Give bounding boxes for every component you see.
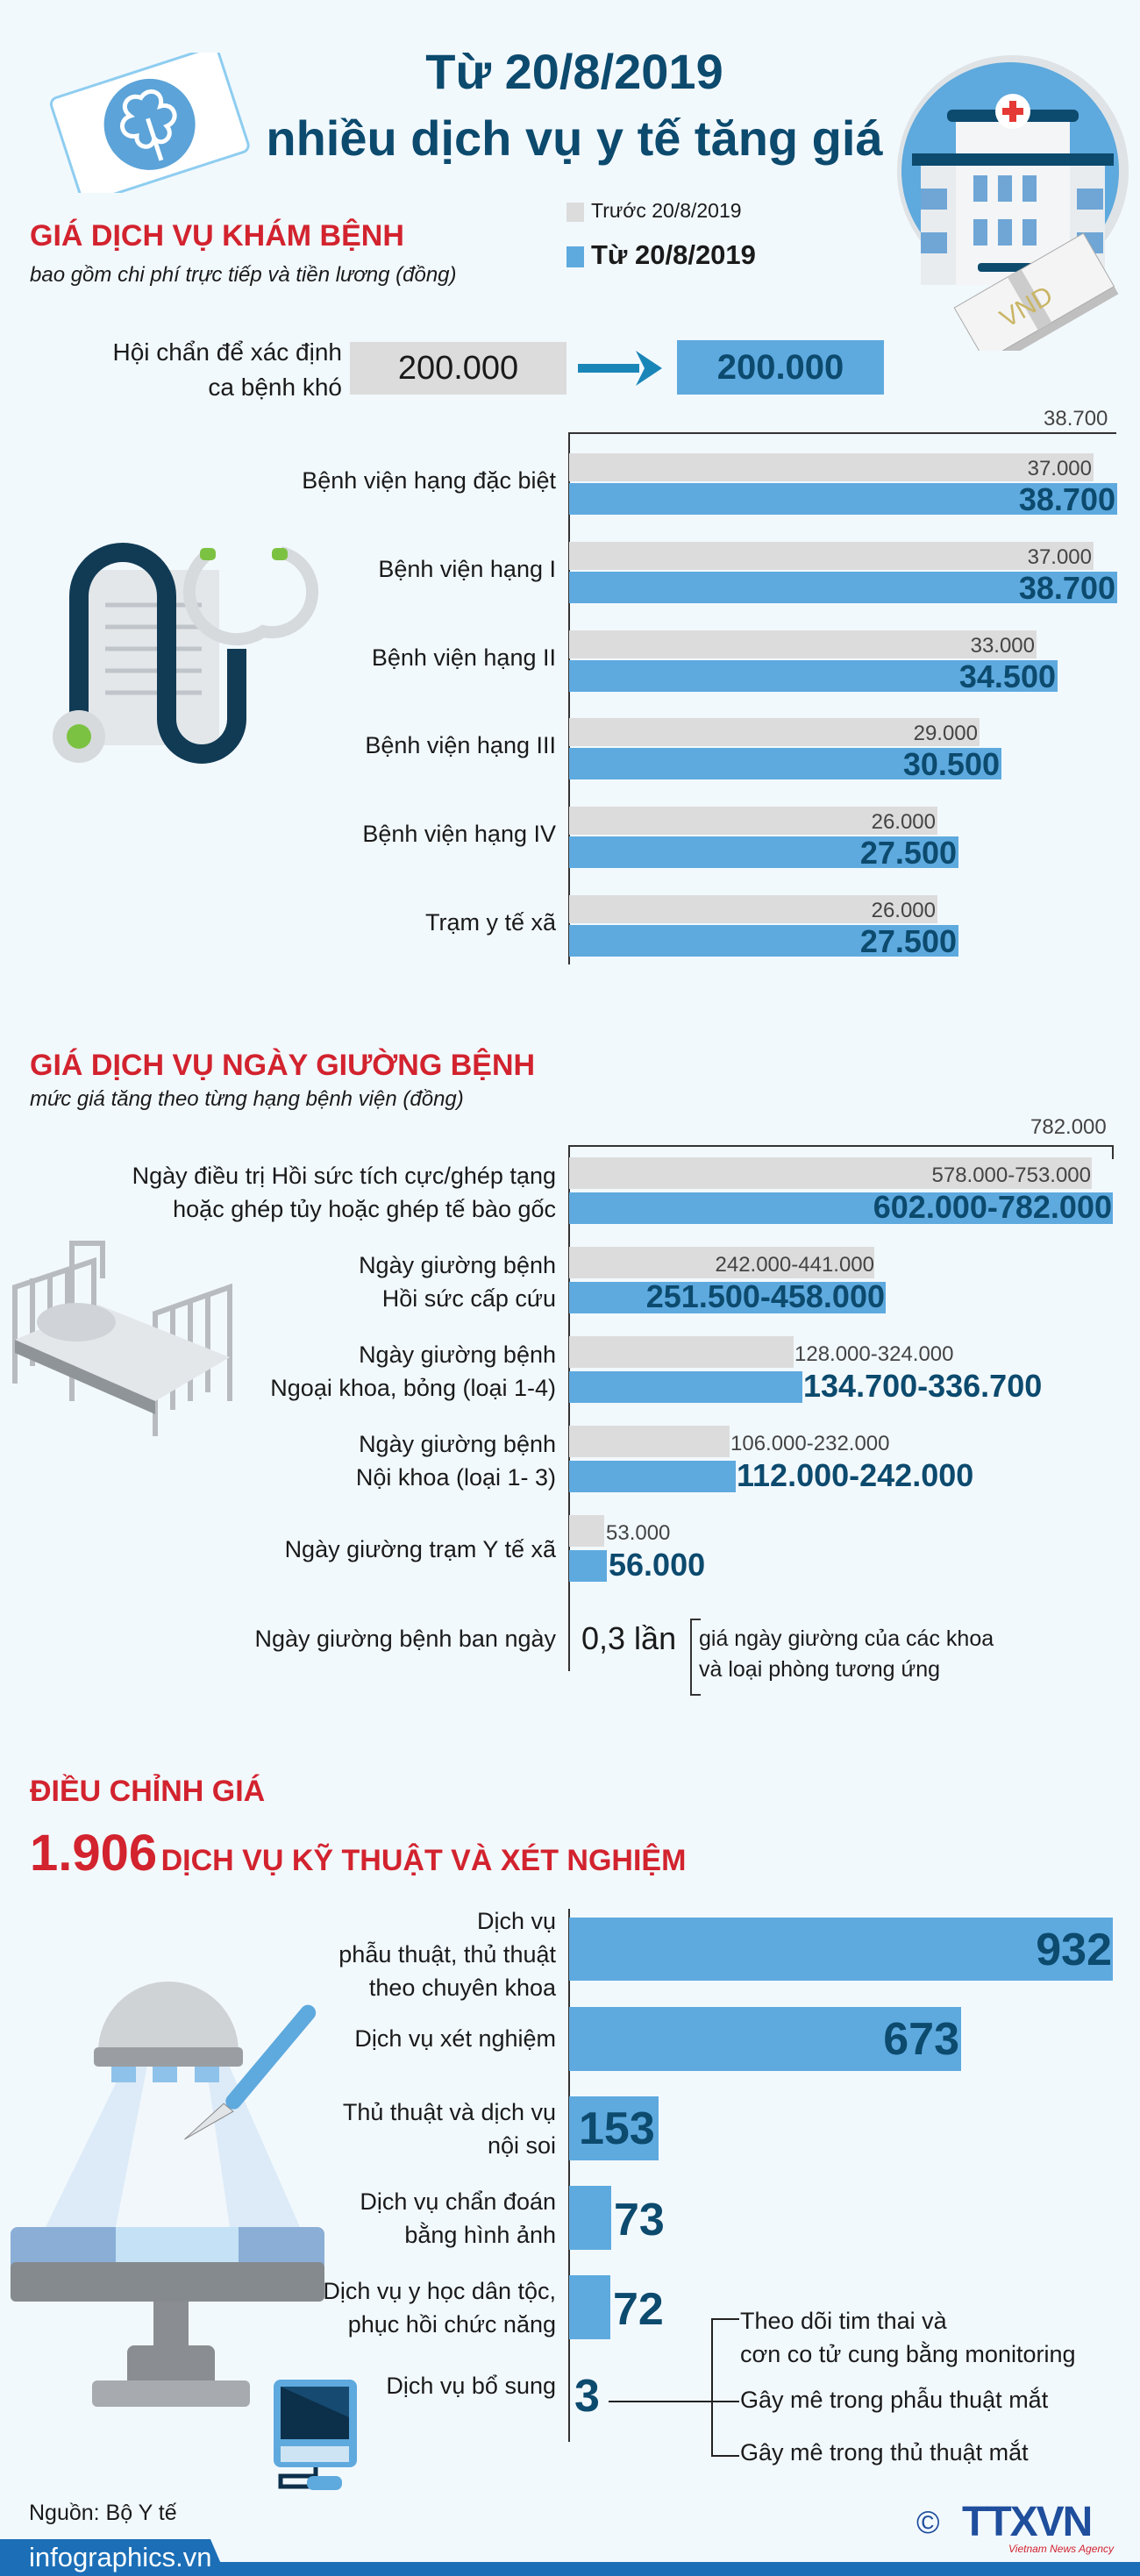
bar: xét nghiệm 673: 673 [883, 2014, 959, 2065]
bar: hình ảnh 73: 73 [614, 2195, 665, 2245]
row: hạng III: 29.000 [914, 722, 978, 745]
icon: hospital with money: VND [995, 281, 1058, 333]
row: trạm y tế xã: 56.000 [609, 1547, 705, 1583]
row: ban ngày: 0,3 lần [581, 1620, 676, 1656]
icon: table pedestal [92, 2302, 250, 2407]
row: ngoại khoa: Ngày giường bệnh [359, 1341, 556, 1368]
row: hội chẩn [112, 338, 884, 401]
source: Nguồn: Bộ Y tế [29, 2501, 177, 2525]
row: nội khoa [356, 1426, 973, 1493]
subtitle: khám bệnh: bao gồm chi phí trực tiếp và tiền lương (đồng) [30, 263, 457, 287]
bar: bổ sung 3 [386, 2371, 600, 2422]
bar chart: dịch vụ kỹ thuật [323, 1908, 1113, 2466]
row: nội khoa: 112.000-242.000 [737, 1457, 973, 1493]
row: trạm y tế xã [425, 895, 958, 959]
logo: TTXVN: TTXVN [962, 2499, 1091, 2545]
logo: TTXVN: Vietnam News Agency [1008, 2543, 1114, 2555]
row: hội chẩn: 200.000 [717, 348, 844, 387]
legend: Từ 20/8/2019 [591, 239, 756, 270]
row: hồi sức tích cực [132, 1157, 1113, 1225]
callout: dịch vụ bổ sung: Theo dõi tim thai và [740, 2308, 947, 2334]
icon: ultrasound monitor [274, 2380, 357, 2490]
row: hạng IV [362, 807, 958, 871]
callout: dịch vụ bổ sung [609, 2308, 1075, 2466]
legend: Trước 20/8/2019 [591, 199, 742, 222]
row: ban ngày: Ngày giường bệnh ban ngày [254, 1626, 556, 1652]
bar: bổ sung 3: 3 [574, 2371, 600, 2422]
callout: dịch vụ bổ sung: Gây mê trong thủ thuật mắt [740, 2439, 1029, 2466]
row: hạng I: 38.700 [1019, 570, 1115, 606]
row: hạng II [372, 630, 1058, 694]
callout: dịch vụ bổ sung: Gây mê trong phẫu thuật mắt [740, 2387, 1048, 2413]
row: hồi sức tích cực: 602.000-782.000 [873, 1189, 1112, 1225]
row: hồi sức cấp cứu: Hồi sức cấp cứu [382, 1285, 556, 1312]
icon: health insurance card [49, 53, 250, 193]
bar: hình ảnh 73 [360, 2186, 665, 2250]
row: ban ngày [254, 1619, 994, 1696]
row: ngoại khoa: Ngoại khoa, bỏng (loại 1-4) [270, 1375, 556, 1401]
row: hồi sức cấp cứu [359, 1247, 886, 1314]
bar: hình ảnh 73: Dịch vụ chẩn đoán [360, 2188, 556, 2215]
row: trạm y tế xã: 53.000 [606, 1521, 670, 1545]
icon: hospital with money [897, 55, 1129, 351]
bar: bổ sung 3: Dịch vụ bổ sung [386, 2373, 556, 2399]
row: trạm y tế xã: Ngày giường trạm Y tế xã [285, 1536, 556, 1562]
row: hạng II: 34.500 [959, 658, 1056, 694]
bar: nội soi 153: 153 [579, 2103, 655, 2154]
icon: surgery lamp and table [11, 1982, 324, 2302]
logo: TTXVN: © [916, 2504, 940, 2540]
row: hạng II: Bệnh viện hạng II [372, 644, 556, 671]
row: hạng IV: Bệnh viện hạng IV [362, 821, 556, 847]
row: hạng III: Bệnh viện hạng III [365, 732, 556, 758]
row: nội khoa: 106.000-232.000 [730, 1432, 889, 1455]
bar: y học dân tộc 72: 72 [613, 2284, 664, 2335]
bar: y học dân tộc 72 [323, 2275, 664, 2339]
title: Từ 20/8/2019 [425, 44, 723, 99]
footer band: infographics.vn [29, 2542, 212, 2572]
bar: phẫu thuật 932 [338, 1908, 1113, 2001]
row: hạng III [365, 718, 1001, 782]
row: ngoại khoa [270, 1336, 1042, 1404]
row: nội khoa: Ngày giường bệnh [359, 1431, 556, 1457]
bar: hình ảnh 73: bằng hình ảnh [404, 2222, 556, 2248]
row: hạng I [378, 542, 1117, 606]
bar: y học dân tộc 72: phục hồi chức năng [348, 2311, 556, 2338]
heading: 1.906 dịch vụ: 1.906 DỊCH VỤ KỸ THUẬT VÀ XÉT NGHIỆM [30, 1825, 686, 1882]
row: ngoại khoa: 128.000-324.000 [794, 1342, 954, 1366]
row: hồi sức tích cực: hoặc ghép tủy hoặc ghép tế bào gốc [173, 1196, 556, 1222]
row: hạng I: 37.000 [1028, 545, 1092, 569]
heading: ngày giường: GIÁ DỊCH VỤ NGÀY GIƯỜNG BỆNH [30, 1049, 535, 1082]
bar: nội soi 153 [343, 2096, 659, 2160]
icon: hospital bed [12, 1241, 232, 1436]
bar chart: khám bệnh: 38.700 [1044, 407, 1108, 431]
row: ban ngày: giá ngày giường của các khoa [699, 1626, 994, 1651]
row: hạng đặc biệt: 38.700 [1019, 481, 1115, 517]
row: hạng đặc biệt [302, 453, 1117, 517]
callout: dịch vụ bổ sung: cơn co tử cung bằng monitoring [740, 2341, 1075, 2367]
row: hội chẩn: Hội chẩn để xác định [112, 338, 342, 366]
bar chart: ngày giường: 782.000 [1030, 1115, 1107, 1139]
row: ban ngày: và loại phòng tương ứng [699, 1657, 940, 1682]
row: trạm y tế xã: 27.500 [860, 923, 957, 959]
bar: xét nghiệm 673 [354, 2007, 961, 2071]
row: hồi sức tích cực: 578.000-753.000 [931, 1163, 1091, 1187]
bar: phẫu thuật 932: 932 [1036, 1925, 1112, 1975]
bar: y học dân tộc 72: Dịch vụ y học dân tộc, [323, 2278, 556, 2304]
row: hạng đặc biệt: Bệnh viện hạng đặc biệt [302, 467, 556, 494]
row: hạng IV: 26.000 [872, 810, 936, 834]
bar: phẫu thuật 932: Dịch vụ [477, 1908, 556, 1934]
row: trạm y tế xã [285, 1515, 705, 1583]
row: nội khoa: Nội khoa (loại 1- 3) [356, 1464, 556, 1491]
row: hội chẩn: ca bệnh khó [208, 374, 342, 401]
row: hạng đặc biệt: 37.000 [1028, 457, 1092, 480]
row: hạng II: 33.000 [971, 634, 1035, 658]
bar: phẫu thuật 932: phẫu thuật, thủ thuật [338, 1941, 556, 1968]
footer band [0, 2539, 1140, 2576]
row: hồi sức tích cực: Ngày điều trị Hồi sức tích cực/ghép tạng [132, 1163, 556, 1189]
row: hội chẩn: 200.000 [398, 350, 518, 387]
bar: nội soi 153: Thủ thuật và dịch vụ [343, 2099, 556, 2125]
row: hồi sức cấp cứu: Ngày giường bệnh [359, 1252, 556, 1278]
row: hồi sức cấp cứu: 251.500-458.000 [646, 1278, 885, 1314]
subtitle: ngày giường: mức giá tăng theo từng hạng bệnh viện (đồng) [30, 1087, 464, 1111]
title [266, 44, 883, 166]
bar: nội soi 153: nội soi [488, 2132, 556, 2159]
row: hạng III: 30.500 [903, 746, 1000, 782]
heading: điều chỉnh giá: ĐIỀU CHỈNH GIÁ [30, 1775, 265, 1808]
legend [566, 199, 756, 270]
heading: khám bệnh: GIÁ DỊCH VỤ KHÁM BỆNH [30, 219, 404, 253]
row: hạng I: Bệnh viện hạng I [378, 556, 556, 582]
icon: stethoscope and document [53, 543, 318, 764]
row: hồi sức cấp cứu: 242.000-441.000 [716, 1253, 874, 1277]
bar: xét nghiệm 673: Dịch vụ xét nghiệm [354, 2025, 556, 2052]
row: trạm y tế xã: Trạm y tế xã [425, 909, 556, 936]
bar chart: dịch vụ kỹ thuật: theo chuyên khoa [369, 1975, 556, 2001]
row: hạng IV: 27.500 [860, 835, 957, 871]
title: nhiều dịch vụ y tế tăng giá [266, 110, 883, 166]
row: ngoại khoa: 134.700-336.700 [803, 1368, 1042, 1404]
logo: TTXVN [916, 2499, 1114, 2555]
row: trạm y tế xã: 26.000 [872, 899, 936, 922]
